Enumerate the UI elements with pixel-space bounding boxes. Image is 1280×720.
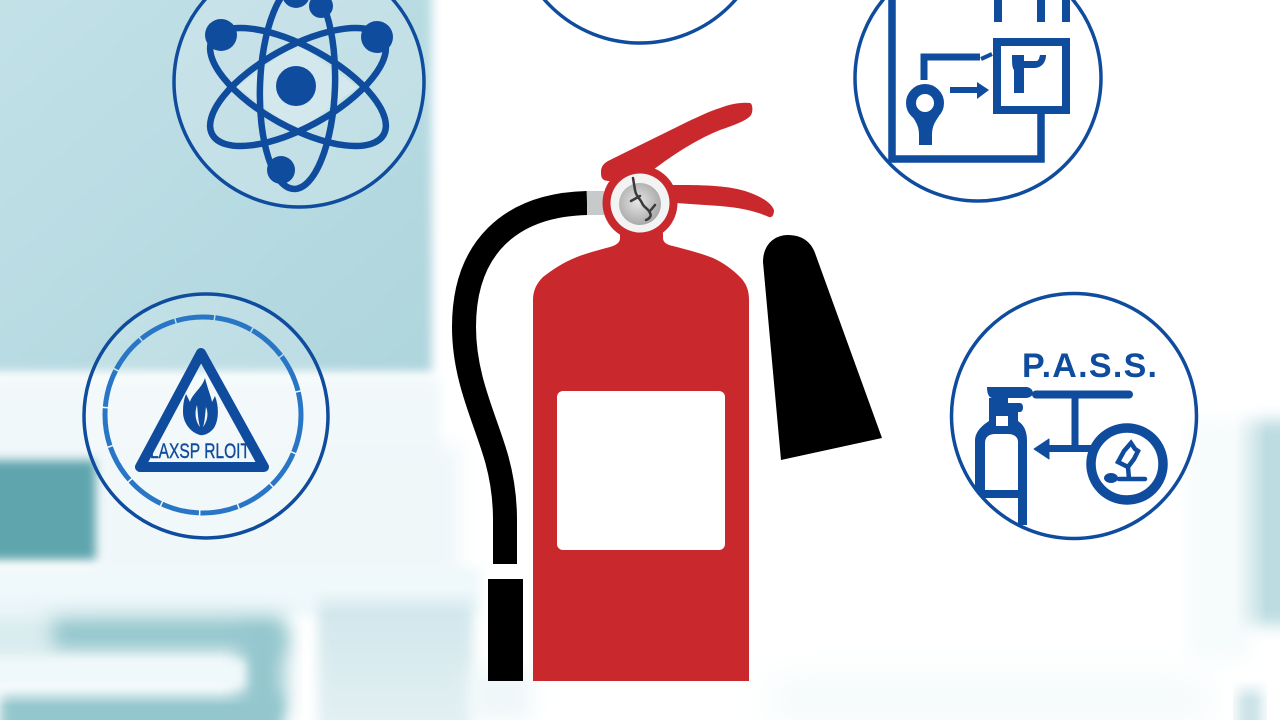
valve ring	[602, 166, 678, 240]
label panel	[557, 391, 725, 550]
hose grip	[488, 579, 523, 681]
hose connector	[587, 191, 604, 215]
hose	[464, 203, 587, 564]
icon: flame	[183, 378, 218, 435]
icon: P.A.S.S. technique	[952, 294, 1196, 538]
icon: fire warning sign	[84, 294, 328, 538]
nozzle horn	[763, 235, 882, 460]
small extinguisher	[975, 387, 1033, 525]
small flame glyph	[1104, 443, 1145, 483]
main fire extinguisher	[464, 103, 882, 681]
pressure gauge	[619, 183, 661, 225]
icon: floor plan route	[855, 0, 1101, 201]
icon: top centre circle	[513, 0, 767, 43]
upper lever	[601, 103, 752, 181]
lower lever	[673, 185, 774, 217]
icon: atom	[174, 0, 424, 207]
cylinder body	[533, 233, 749, 681]
P.A.S.S. label: P.A.S.S.	[1022, 347, 1157, 385]
sign label: LAXSP RLOIT	[150, 440, 250, 463]
